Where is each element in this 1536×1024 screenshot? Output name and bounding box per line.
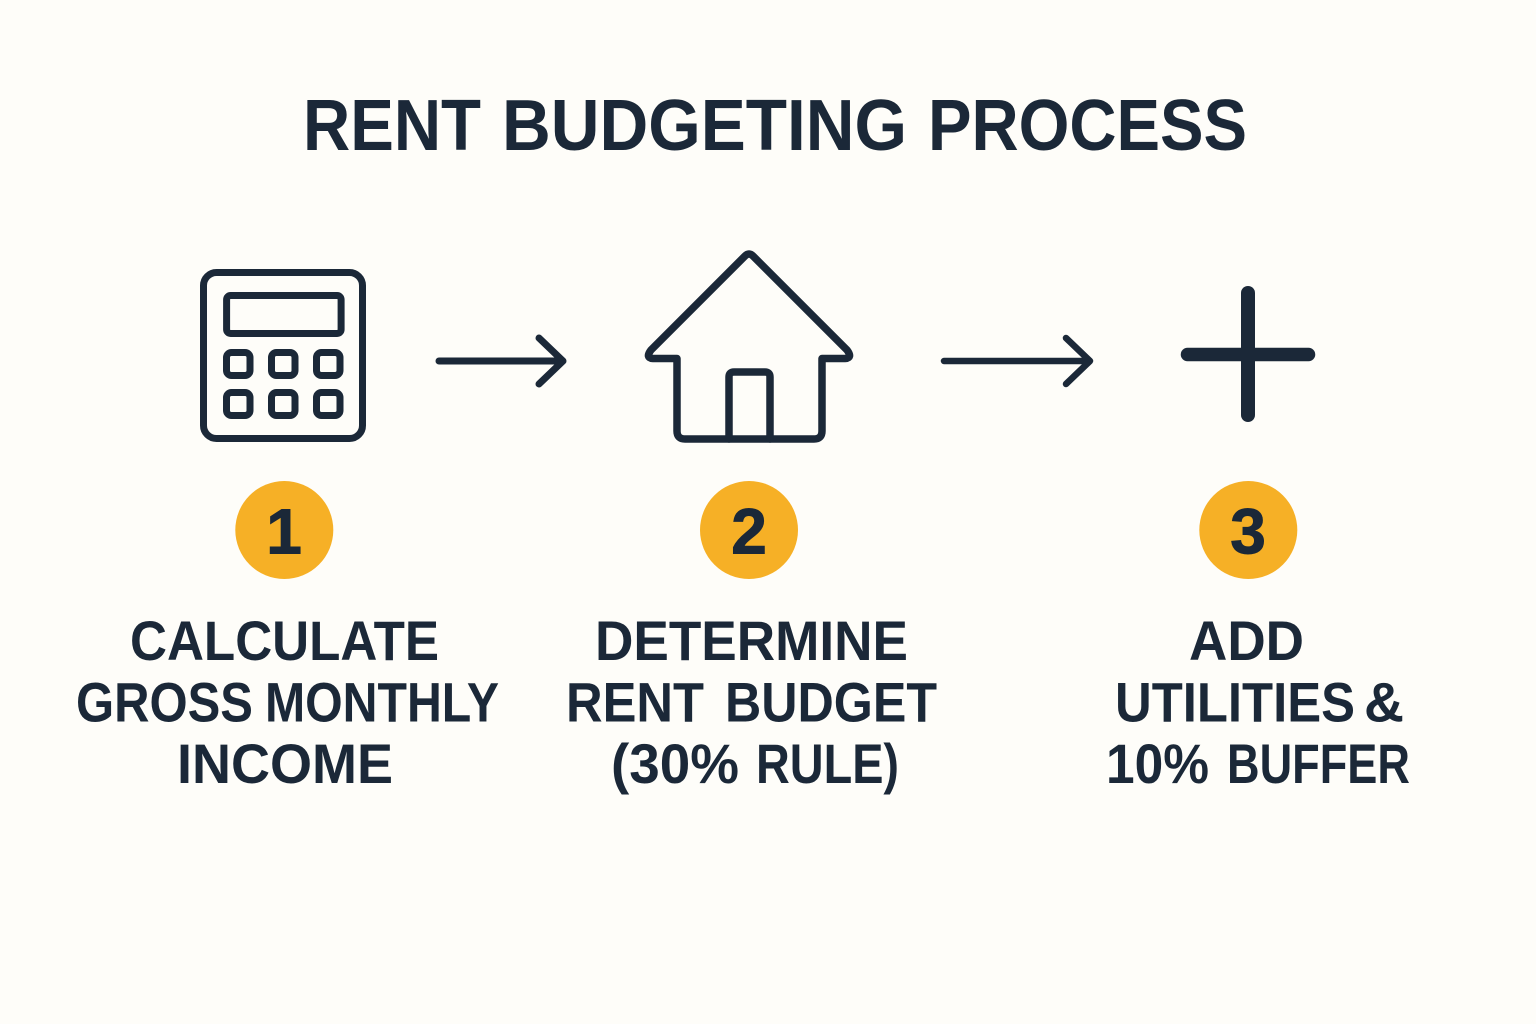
label: step 2: DETERMINE [595,609,908,672]
label: step 1: MONTHLY [265,671,499,734]
label: step 3: UTILITIES [1115,671,1355,734]
label: step 3: 10% [1106,732,1209,795]
title: PROCESS [928,86,1247,166]
label: step 2: RULE) [756,732,899,795]
label: step 3 [1106,609,1410,795]
badge: step 2: 2 [731,496,767,568]
label: step 3: BUFFER [1227,732,1410,795]
title: BUDGETING [502,86,907,166]
icon: house [648,254,850,439]
label: step 1: GROSS [76,671,253,734]
label: step 2: RENT [566,671,704,734]
label: step 1 [76,609,499,795]
label: step 3: & [1364,671,1404,734]
label: step 3: ADD [1189,609,1304,672]
arrow: step 1 to step 2 [439,338,563,384]
arrow: step 2 to step 3 [944,338,1090,384]
badge: step 3: 3 [1230,496,1266,568]
badge: step 3 [1199,481,1297,579]
label: step 2: (30% [611,732,739,795]
label: step 2: BUDGET [725,671,937,734]
badge: step 2 [700,481,798,579]
badge: step 1 [235,481,333,579]
badge: step 1: 1 [266,496,302,568]
icon: plus [1188,293,1308,415]
icon: calculator [204,272,362,438]
title: RENT [303,86,481,166]
label: step 1: CALCULATE [130,609,439,672]
label: step 2 [566,609,937,795]
label: step 1: INCOME [177,732,393,795]
